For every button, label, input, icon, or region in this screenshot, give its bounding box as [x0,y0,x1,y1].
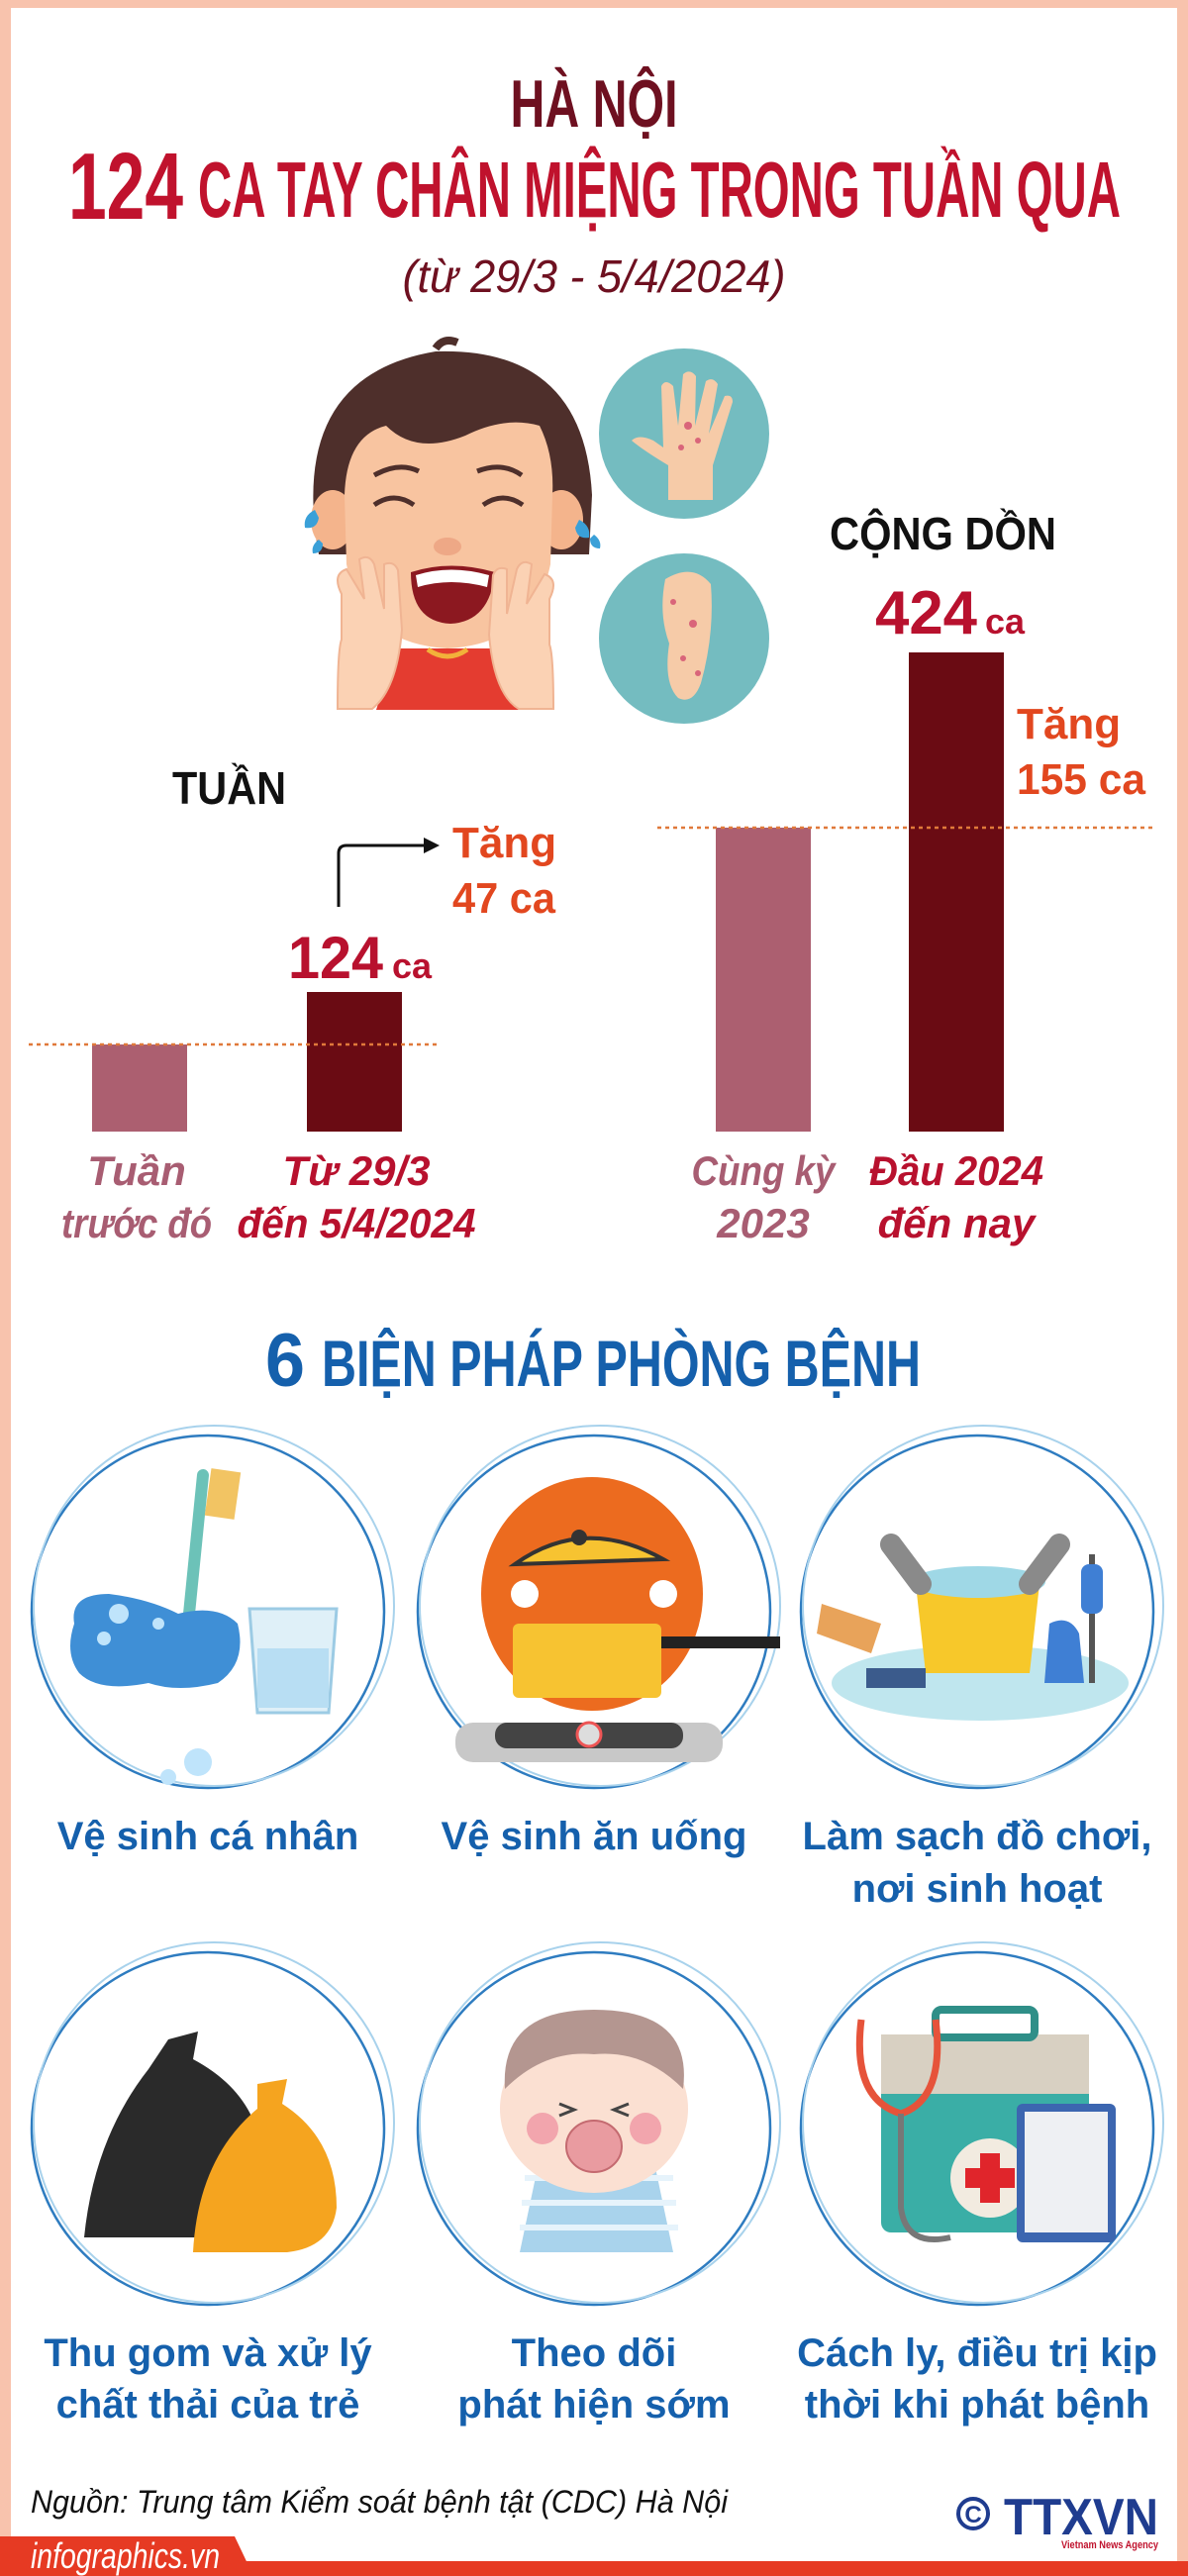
icon: hand with rash [599,348,769,519]
label: nơi sinh hoạt [852,1867,1102,1911]
heading: 6 biện pháp phòng bệnh: BIỆN PHÁP PHÒNG BỆNH [322,1327,921,1400]
value: 124 ca: 124 [288,925,384,991]
illustration: crying boy [305,341,600,710]
icon: garbage bags [84,2031,337,2252]
heading: 6 biện pháp phòng bệnh: 6 [265,1319,305,1403]
icon: sick child [500,2010,688,2252]
panel: cách ly điều trị [797,1942,1163,2427]
label [797,2331,1157,2427]
labels: weekly bars [61,1147,475,1246]
logo: TTXVN [958,2489,1159,2551]
title: main headline: 124 [68,134,183,240]
title: Hà Nội: HÀ NỘI [511,65,677,142]
panel: vệ sinh cá nhân [32,1426,394,1858]
footer bar: infographics.vn [0,2535,1188,2576]
callout: tăng 155 ca: Tăng [1017,700,1121,748]
footer bar: infographics.vn: infographics.vn [31,2535,220,2576]
labels: weekly bars: Từ 29/3 [282,1147,431,1194]
label: Theo dõi [512,2331,676,2375]
bar chart: cumulative [657,652,1155,1132]
label: phát hiện sớm [457,2383,731,2427]
arrow: increase [339,838,440,907]
panel: vệ sinh ăn uống [418,1426,780,1858]
label [44,2331,372,2427]
callout: tăng 47 ca: Tăng [452,819,556,867]
heading: Tuần: TUẦN [172,762,286,814]
value: 424 ca [875,579,1026,647]
icon: medical kit and clipboard [859,2010,1116,2242]
panel: theo dõi phát hiện sớm [418,1942,780,2427]
value: 424 ca: ca [985,601,1026,642]
labels: weekly bars: đến 5/4/2024 [238,1200,475,1246]
label [457,2331,731,2427]
heading: Cộng dồn: CỘNG DỒN [830,508,1056,559]
labels: cumulative bars [691,1147,1043,1246]
callout: tăng 155 ca [1017,700,1146,804]
logo: TTXVN: TTXVN [1004,2489,1158,2546]
label: chất thải của trẻ [56,2383,359,2427]
callout: tăng 155 ca: 155 ca [1017,755,1146,804]
label: thời khi phát bệnh [805,2383,1149,2427]
source note: Nguồn: Trung tâm Kiểm soát bệnh tật (CDC) Hà Nội [31,2484,729,2520]
label [803,1815,1151,1911]
labels: cumulative bars: 2023 [716,1200,810,1246]
label: Vệ sinh cá nhân [57,1815,358,1858]
icon: pot on stove [455,1477,780,1762]
labels: cumulative bars: đến nay [878,1200,1038,1246]
panel: làm sạch đồ chơi [801,1426,1163,1911]
label: Làm sạch đồ chơi, [803,1815,1151,1858]
value: 124 ca: ca [392,945,433,986]
heading: 6 biện pháp phòng bệnh [265,1319,921,1403]
labels: weekly bars: Tuần [87,1147,186,1194]
logo: TTXVN: C [964,2502,982,2528]
logo: TTXVN: Vietnam News Agency [1061,2539,1159,2551]
value: 124 ca [288,925,433,991]
value: 424 ca: 424 [875,579,978,647]
icon: cleaning bucket [817,1544,1129,1721]
subtitle: date range: (từ 29/3 - 5/4/2024) [402,250,786,302]
labels: weekly bars: trước đó [61,1200,212,1246]
callout: tăng 47 ca: 47 ca [452,874,555,923]
labels: cumulative bars: Cùng kỳ [691,1147,838,1194]
label: Cách ly, điều trị kịp [797,2331,1157,2375]
title: main headline [68,134,1121,240]
panel: thu gom chất thải [32,1942,394,2427]
icon: sponge, toothbrush, glass [70,1468,337,1785]
label: Vệ sinh ăn uống [442,1815,746,1858]
labels: cumulative bars: Đầu 2024 [869,1147,1043,1194]
bar chart: weekly [29,992,440,1132]
icon: foot with rash [599,553,769,724]
label: Thu gom và xử lý [44,2331,372,2375]
callout: tăng 47 ca [452,819,556,923]
